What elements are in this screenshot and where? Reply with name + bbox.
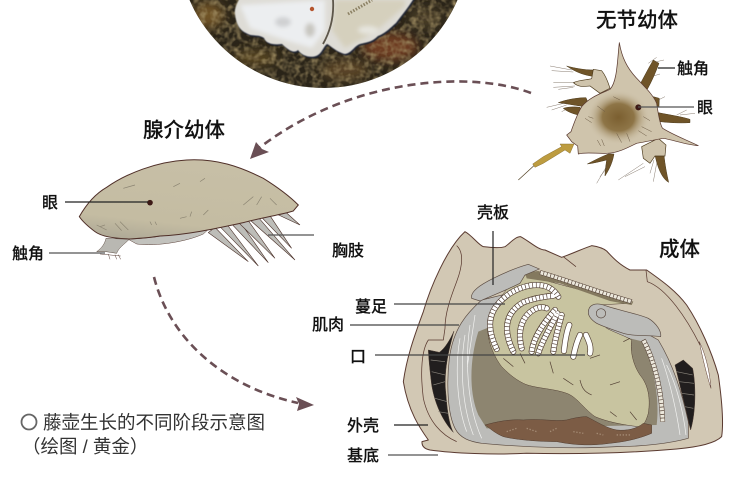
label: outer shell: 外壳	[347, 417, 379, 435]
nauplius body	[567, 43, 698, 154]
title: cyprid larva: 腺介幼体	[143, 119, 225, 142]
adult inner cavity	[471, 305, 658, 428]
caption: （绘图 / 黄金）	[22, 436, 148, 457]
label: eye nauplius	[638, 100, 713, 117]
title: adult: 成体	[659, 238, 700, 261]
label: thoracic limbs: 胸肢	[332, 242, 364, 260]
adult roof band	[525, 271, 633, 305]
adult shell plate lines	[422, 246, 700, 442]
photo: barnacle on rock	[190, 0, 458, 88]
adult right segmented strip	[643, 340, 663, 422]
adult brown mass	[485, 417, 652, 445]
cyprid antenna	[97, 238, 129, 259]
nauplius brown centre	[587, 90, 650, 145]
arrow: cyprid to adult	[154, 277, 314, 411]
adult soft body	[488, 275, 649, 427]
cyprid thoracic limbs	[208, 210, 300, 266]
adult mass speckles	[507, 428, 630, 435]
label: antenna nauplius: 触角	[677, 60, 709, 78]
label: antenna cyprid: 触角	[12, 245, 44, 263]
nauplius pale limbs	[573, 69, 666, 163]
adult shell plate gray	[471, 264, 539, 301]
adult shell white sliver	[699, 342, 711, 388]
adult gray arm with ring	[588, 304, 661, 337]
caption: 藤壶生长的不同阶段示意图	[43, 412, 265, 433]
label: mouth: 口	[350, 349, 366, 366]
adult left black wedge	[428, 331, 454, 432]
label: antenna cyprid	[12, 245, 105, 263]
illustration: adult barnacle cross-section	[403, 232, 723, 454]
adult right black wedge	[675, 360, 695, 430]
label: base	[347, 447, 438, 465]
arrow: nauplius to cyprid	[250, 81, 531, 159]
cyprid eye	[147, 200, 153, 205]
nauplius frontal spine	[518, 144, 574, 180]
title: nauplius larva: 无节幼体	[596, 9, 678, 32]
label: shell plate: 壳板	[477, 204, 509, 222]
label: eye nauplius: 眼	[697, 100, 713, 117]
adult segmented plate strip	[540, 272, 632, 302]
nauplius eye	[635, 104, 641, 110]
label: cirri: 蔓足	[355, 298, 387, 316]
cyprid belly	[128, 225, 213, 245]
caption	[22, 412, 265, 457]
label: outer shell	[347, 417, 428, 435]
caption bullet	[22, 414, 36, 430]
adult body veins	[503, 338, 637, 420]
label: eye cyprid: 眼	[42, 195, 58, 212]
nauplius hairs	[547, 57, 695, 183]
illustration: nauplius larva	[518, 43, 698, 183]
adult gray mantle	[448, 285, 688, 448]
label: antenna nauplius	[658, 60, 709, 78]
adult cirri	[490, 285, 590, 357]
label: eye cyprid	[42, 195, 148, 212]
label: shell plate	[477, 204, 509, 285]
nauplius legs	[558, 60, 690, 182]
adult outer shell	[403, 232, 723, 454]
label: base: 基底	[347, 447, 379, 465]
cyprid carapace	[79, 160, 298, 239]
nauplius body marks	[585, 97, 652, 146]
label: thoracic limbs	[268, 235, 364, 260]
cyprid shell marks	[97, 178, 277, 231]
label: muscle: 肌肉	[312, 316, 344, 334]
adult mantle muscle streaks	[457, 315, 686, 438]
illustration: cyprid larva	[79, 160, 300, 266]
